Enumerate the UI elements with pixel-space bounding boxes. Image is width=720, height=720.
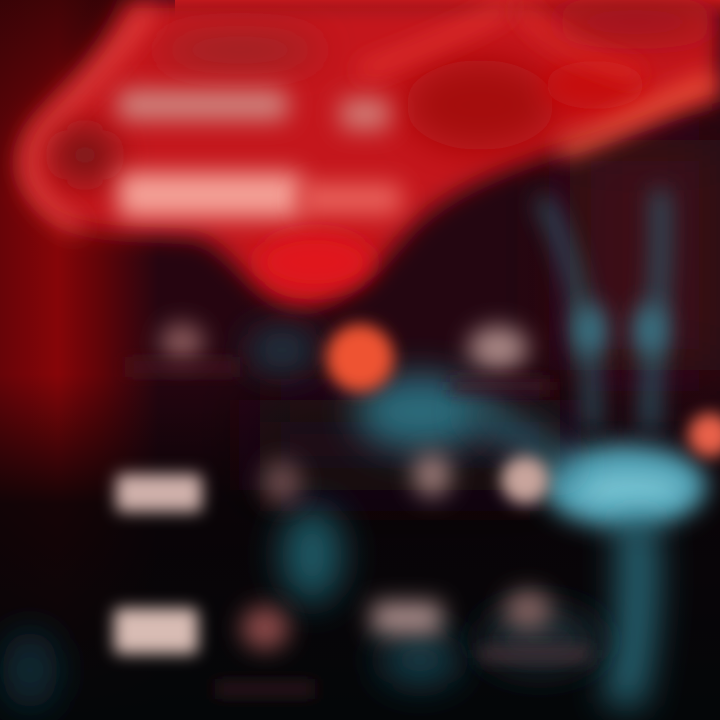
- teal hub: [543, 444, 707, 528]
- panel: red header wave: [20, 0, 720, 308]
- wave highlight edge: [30, 8, 150, 228]
- icon: pale node: [501, 456, 549, 504]
- teal network: [2, 190, 707, 710]
- teal stems: [622, 520, 638, 705]
- heading line 2: [118, 172, 302, 218]
- heading line 1: [118, 90, 288, 120]
- icon: orange edge node: [688, 413, 720, 457]
- header top edge: [175, 0, 720, 20]
- icon: orange node: [326, 324, 394, 392]
- blurred text blocks: [114, 323, 590, 694]
- dark spot in header: [55, 129, 115, 181]
